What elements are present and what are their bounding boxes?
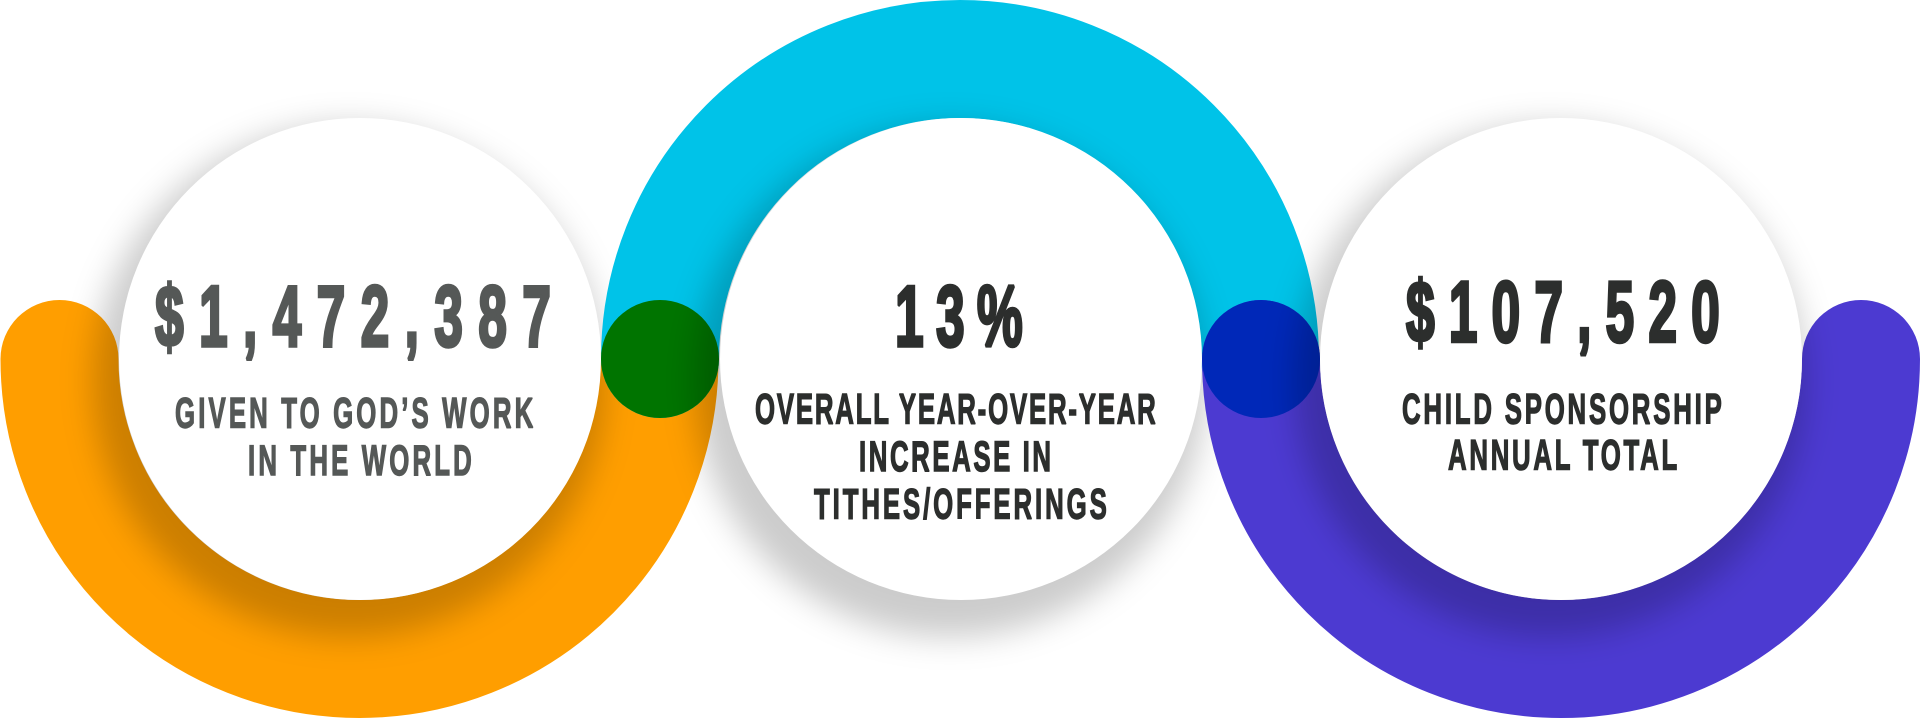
purple ring arc: [1261, 359, 1861, 659]
blue junction circle: [1202, 300, 1320, 418]
center white circle: [720, 118, 1202, 600]
green junction circle: [601, 300, 719, 418]
right white circle: [1320, 118, 1802, 600]
center circle shadow: [694, 125, 1206, 637]
center caption: INCREASE IN: [859, 432, 1051, 481]
left stat text: [155, 270, 551, 485]
left caption: IN THE WORLD: [248, 436, 472, 485]
right caption: [1402, 384, 1722, 479]
right figure: $107,520: [1406, 265, 1720, 361]
center figure: 13%: [895, 270, 1023, 366]
left figure: $1,472,387: [155, 270, 551, 366]
right caption: ANNUAL TOTAL: [1448, 430, 1677, 479]
cyan ring arc: [660, 59, 1260, 359]
center caption: TITHES/OFFERINGS: [814, 479, 1107, 528]
left caption: GIVEN TO GOD’S WORK: [175, 388, 533, 437]
left caption: [175, 388, 533, 485]
center caption: [755, 384, 1156, 528]
right circle shadow: [1294, 125, 1806, 637]
center stat text: [755, 270, 1156, 528]
left circle shadow: [93, 125, 605, 637]
right caption: CHILD SPONSORSHIP: [1402, 384, 1722, 433]
orange ring arc: [60, 359, 660, 659]
left white circle: [119, 118, 601, 600]
right stat text: [1402, 265, 1722, 479]
center caption: OVERALL YEAR-OVER-YEAR: [755, 384, 1156, 433]
